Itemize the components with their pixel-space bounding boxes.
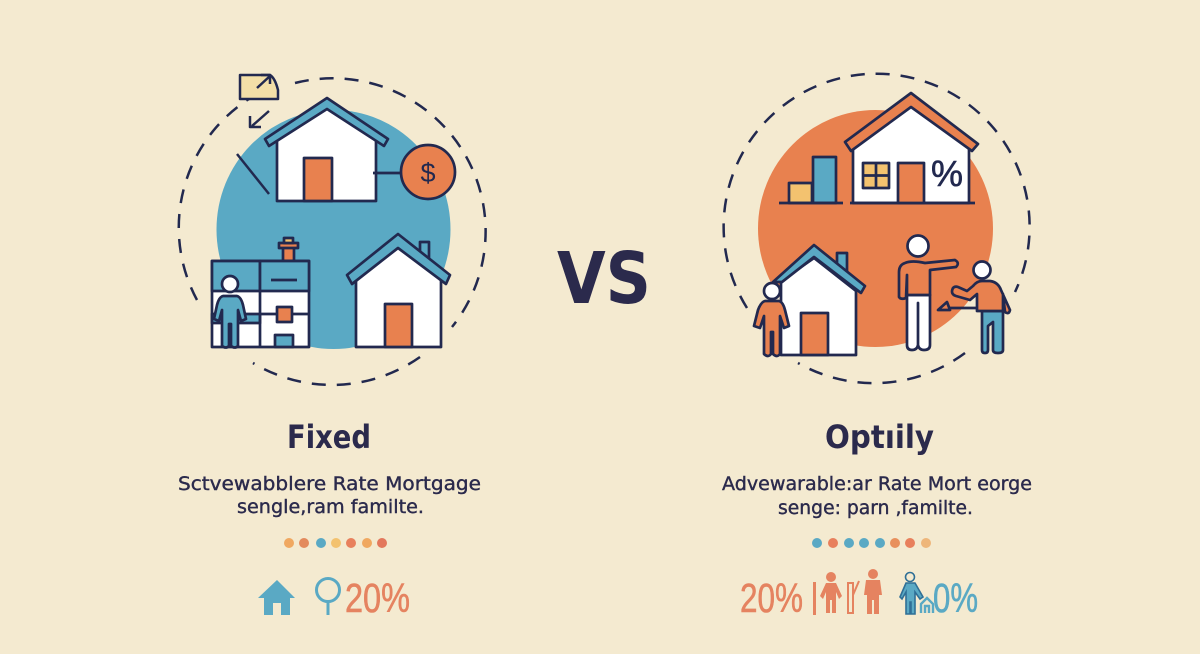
icon: pin — [316, 578, 340, 615]
dot row — [284, 538, 387, 548]
blue background circle — [216, 110, 450, 349]
icon: person beside house — [754, 283, 789, 356]
text block: fixed description — [178, 473, 481, 518]
bar chart — [779, 157, 843, 203]
icon: percent house — [845, 93, 978, 203]
icon: percent house: % — [931, 153, 963, 194]
panel: fixed illustration — [179, 75, 486, 385]
icon: small house — [258, 580, 295, 615]
panel: optily text — [722, 418, 1032, 621]
icon: child with arrow — [938, 262, 1010, 353]
icon: blue person with small house — [900, 572, 933, 614]
icon: pointing adult — [899, 236, 958, 350]
orange background circle — [758, 110, 993, 347]
stat: 20%: 20% — [345, 575, 410, 621]
icon: lower house — [347, 234, 450, 347]
heading: VS: VS — [557, 237, 651, 320]
heading: Optily: Optıily — [825, 418, 934, 456]
text block: optily description: Advewarable:ar Rate Mort eorge — [722, 473, 1032, 495]
diagonal line — [237, 154, 269, 194]
text block: optily description: senge: parn ,familte. — [778, 497, 973, 519]
icon: orange people — [813, 569, 882, 615]
stat: 20%: 20% — [740, 575, 803, 621]
dashed orbit ring — [179, 78, 486, 385]
text block: fixed description: Sctvewabblere Rate Mortgage — [178, 473, 481, 495]
icon: building with person — [212, 238, 309, 348]
icon: envelope with arrows — [240, 75, 278, 127]
panel: fixed text — [178, 418, 481, 621]
text block: optily description — [722, 473, 1032, 519]
heading: Fixed: Fixed — [287, 418, 371, 456]
icon: top house — [265, 98, 388, 201]
stat: 0%: 0% — [933, 575, 978, 621]
panel: optily illustration — [724, 74, 1030, 383]
icon: lower house with person — [754, 245, 865, 356]
icon: person in building — [214, 276, 246, 348]
text block: fixed description: sengle,ram familte. — [237, 496, 424, 518]
icon: dollar coin — [373, 145, 455, 199]
icon: dollar coin: $ — [420, 158, 436, 188]
dot row — [812, 538, 931, 548]
dashed orbit ring — [724, 74, 1030, 383]
